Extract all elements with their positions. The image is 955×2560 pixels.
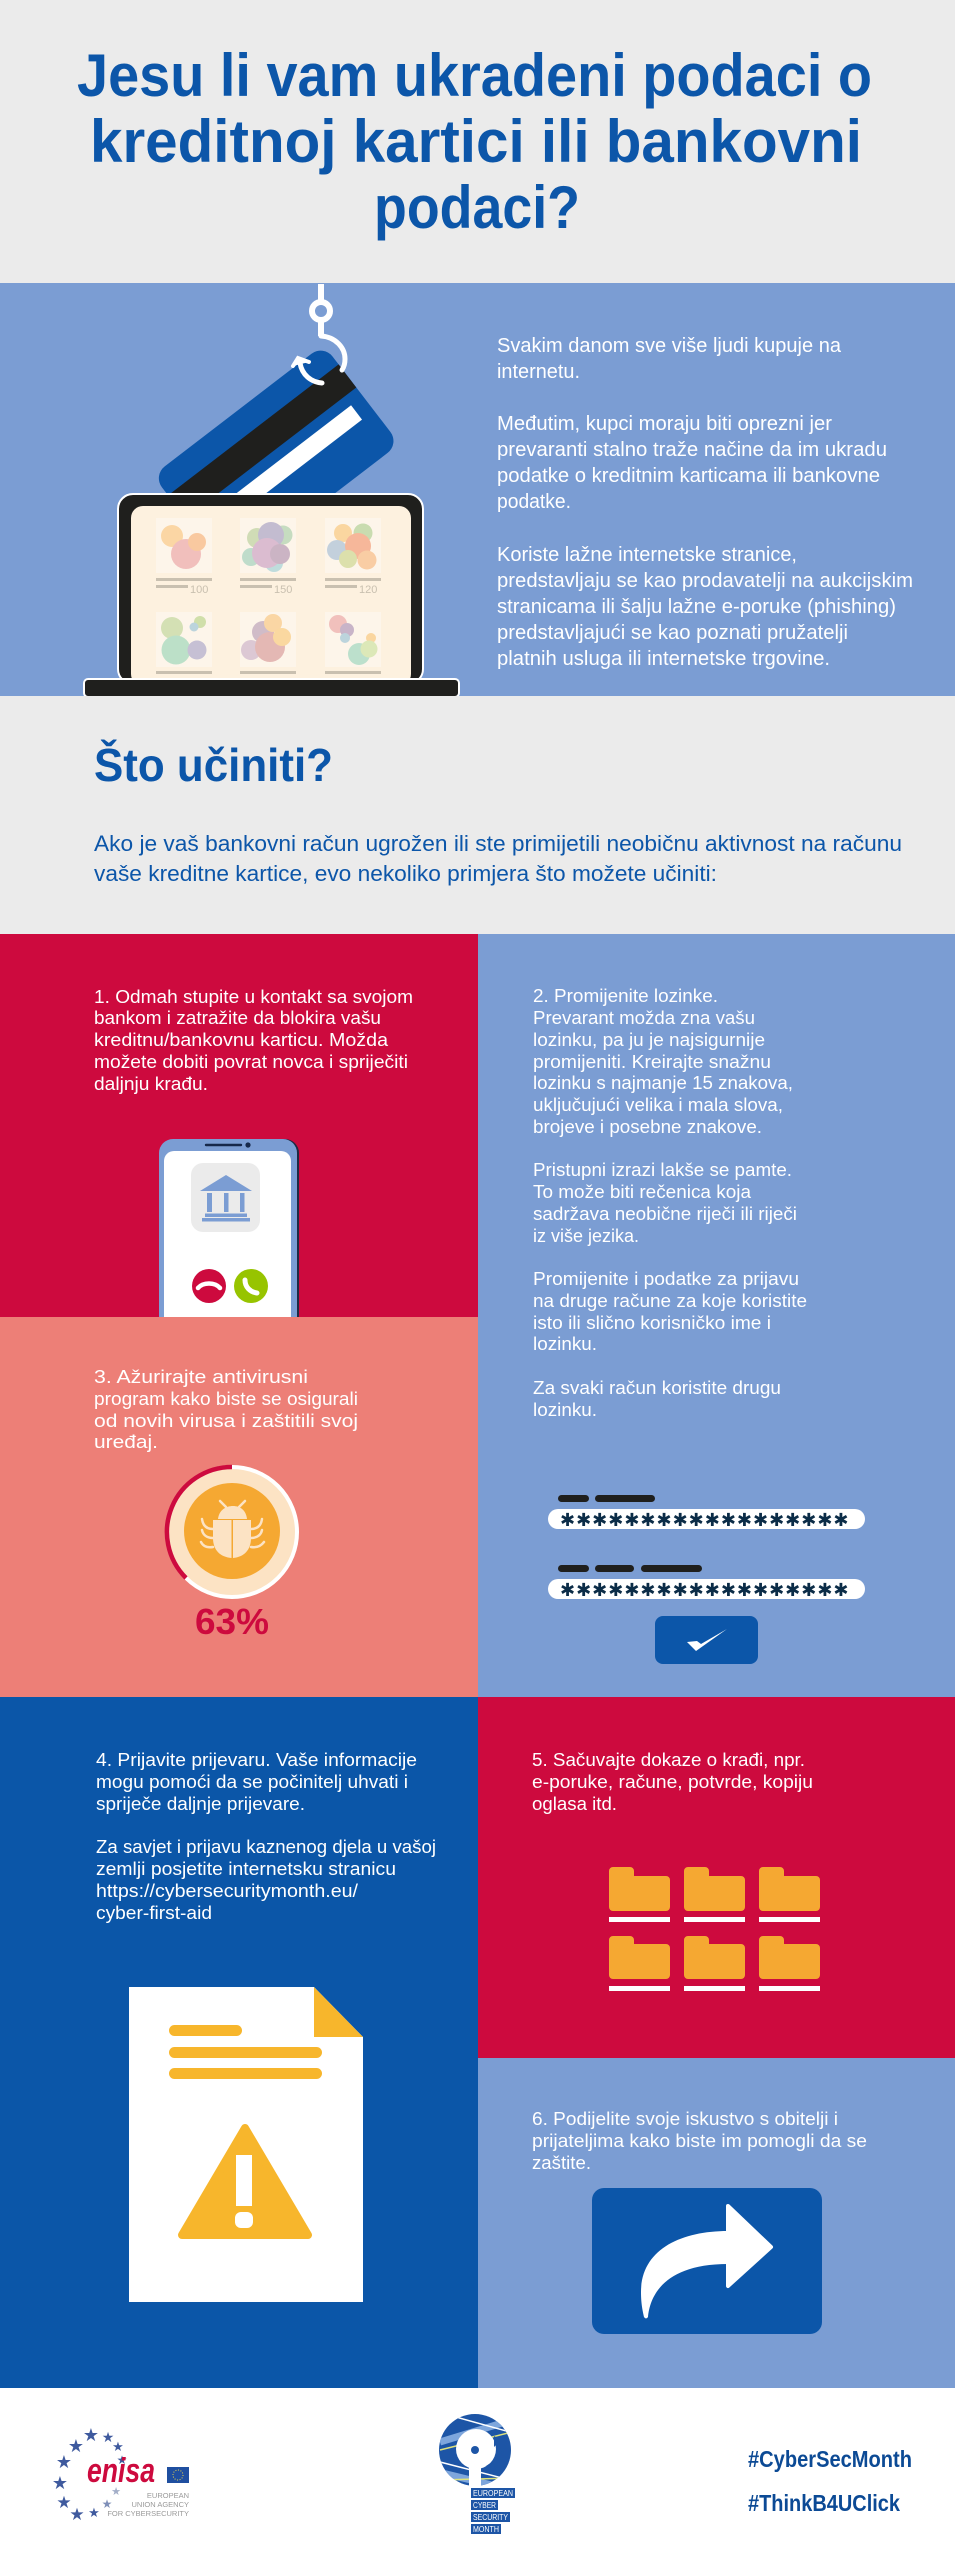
logo: enisa: EUROPEAN: [147, 2491, 189, 2500]
text block: what to do intro: Ako je vaš bankovni račun ugrožen ili ste primijetili neobičnu aktivnost na računu: [94, 831, 902, 856]
icon: laptop: 150: [274, 584, 292, 596]
text block: what to do intro: [94, 831, 902, 886]
logo: enisa: enisa: [87, 2452, 155, 2490]
text block: step 4: spriječe daljnje prijevare.: [96, 1793, 305, 1814]
hashtags: #CyberSecMonth: [748, 2446, 912, 2472]
text block: step 6: zaštite.: [532, 2152, 591, 2173]
text block: step 2: 2. Promijenite lozinke.: [533, 985, 718, 1006]
value: 63%: 63%: [195, 1601, 269, 1642]
logo: enisa: ★: [111, 2485, 121, 2498]
text block: introduction: prevaranti stalno traže načine da im ukradu: [497, 439, 887, 461]
panel: step 1: [0, 934, 478, 1317]
panel: what to do: [0, 696, 955, 934]
text block: step 2: Za svaki račun koristite drugu: [533, 1377, 781, 1398]
panel: title header: [0, 0, 955, 283]
text block: step 5: 5. Sačuvajte dokaze o krađi, npr.: [532, 1749, 805, 1770]
icon: laptop: [84, 494, 459, 697]
text block: introduction: internetu.: [497, 361, 580, 383]
logo: enisa: ★: [83, 2425, 99, 2446]
logo: european cyber security month: CYBER: [473, 2500, 496, 2510]
text block: introduction: podatke o kreditnim karticama ili bankovne: [497, 465, 880, 487]
text block: introduction: [497, 335, 913, 670]
logo: enisa: ★: [56, 2452, 72, 2473]
text block: introduction: Međutim, kupci moraju biti oprezni jer: [497, 413, 832, 435]
text block: step 3: uređaj.: [94, 1431, 158, 1452]
logo: enisa: ★: [69, 2505, 85, 2525]
text block: step 2: To može biti rečenica koja: [533, 1181, 752, 1202]
text block: step 6: prijateljima kako biste im pomogli da se: [532, 2130, 867, 2151]
panel: step 3: [0, 1317, 478, 1697]
icon: document with warning: [129, 1987, 363, 2302]
panel: step 5: [478, 1697, 955, 2058]
text block: step 6: [532, 2108, 867, 2173]
text block: step 2: Promijenite i podatke za prijavu: [533, 1268, 799, 1289]
text block: step 2: iz više jezika.: [533, 1225, 639, 1246]
panel: step 6: [478, 2058, 955, 2388]
icon: password form: ✱✱✱✱✱✱✱✱✱✱✱✱✱✱✱✱✱✱: [560, 1510, 849, 1531]
text block: step 1: [94, 986, 413, 1094]
icon: laptop: 100: [190, 584, 208, 596]
logo: enisa: ★: [102, 2497, 112, 2511]
logo: enisa: ★: [117, 2453, 127, 2467]
logo: enisa: UNION AGENCY: [131, 2500, 189, 2509]
text block: introduction: Koriste lažne internetske stranice,: [497, 544, 797, 566]
text block: step 2: promijeniti. Kreirajte snažnu: [533, 1051, 771, 1072]
logo: enisa: ★: [102, 2430, 114, 2446]
text block: step 3: 3. Ažurirajte antivirusni: [94, 1366, 308, 1387]
title: [77, 42, 872, 241]
hashtags: #ThinkB4UClick: [748, 2490, 900, 2516]
text block: step 2: Prevarant možda zna vašu: [533, 1007, 755, 1028]
logo: enisa: ★: [56, 2493, 72, 2513]
icon: laptop: 120: [359, 584, 377, 596]
icon: phone with bank call: [159, 1139, 299, 1317]
text block: step 1: bankom i zatražite da blokira vašu: [94, 1007, 381, 1028]
logo: enisa: ★: [88, 2506, 100, 2521]
logo: european cyber security month: [438, 2414, 515, 2534]
text block: step 1: možete dobiti povrat novca i spriječiti: [94, 1051, 408, 1072]
text block: introduction: podatke.: [497, 491, 571, 513]
text block: step 2: lozinku.: [533, 1333, 597, 1354]
logo: enisa: FOR CYBERSECURITY: [107, 2509, 189, 2518]
text block: step 1: kreditnu/bankovnu karticu. Možda: [94, 1029, 389, 1050]
text block: introduction: stranicama ili šalju lažne e-poruke (phishing): [497, 596, 896, 618]
heading: Što učiniti?: [94, 739, 333, 791]
panel: hero introduction: [0, 283, 955, 697]
text block: step 2: na druge račune za koje koristite: [533, 1290, 807, 1311]
text block: step 5: [532, 1749, 813, 1814]
icon: share arrow: [592, 2188, 822, 2334]
logo: european cyber security month: SECURITY: [473, 2512, 508, 2522]
text block: step 1: 1. Odmah stupite u kontakt sa svojom: [94, 986, 413, 1007]
icon: fishing hook line: [312, 284, 330, 336]
hashtags: [748, 2446, 912, 2516]
text block: step 1: daljnju krađu.: [94, 1073, 208, 1094]
text block: step 2: brojeve i posebne znakove.: [533, 1116, 762, 1137]
text block: introduction: predstavljajući se kao poznati pružatelji: [497, 622, 848, 644]
panel: footer: [53, 2414, 911, 2534]
logo: enisa: ★: [68, 2436, 84, 2457]
text block: step 2: lozinku.: [533, 1399, 597, 1420]
text block: step 2: lozinku s najmanje 15 znakova,: [533, 1072, 793, 1093]
logo: european cyber security month: EUROPEAN: [473, 2488, 513, 2498]
text block: step 4: mogu pomoći da se počinitelj uhvati i: [96, 1771, 408, 1792]
icon: password form: ✱✱✱✱✱✱✱✱✱✱✱✱✱✱✱✱✱✱: [560, 1580, 849, 1601]
text block: step 2: Pristupni izrazi lakše se pamte.: [533, 1159, 792, 1180]
logo: enisa: [52, 2425, 189, 2525]
text block: step 4: [96, 1749, 436, 1923]
icon: hook tip: [293, 336, 345, 383]
title: podaci?: [374, 174, 580, 241]
text block: introduction: platnih usluga ili internetske trgovine.: [497, 648, 830, 670]
text block: step 3: program kako biste se osigurali: [94, 1388, 358, 1409]
text block: what to do intro: vaše kreditne kartice, evo nekoliko primjera što možete učiniti:: [94, 861, 717, 886]
panel: step 2: [478, 934, 955, 1697]
text block: step 2: [533, 985, 807, 1420]
text block: introduction: Svakim danom sve više ljudi kupuje na: [497, 335, 842, 357]
panel: step 4: [0, 1697, 478, 2388]
text block: step 4: Za savjet i prijavu kaznenog djela u vašoj: [96, 1836, 436, 1857]
text block: step 5: e-poruke, račune, potvrde, kopiju: [532, 1771, 813, 1792]
icon: credit card: [153, 345, 399, 575]
title: kreditnoj kartici ili bankovni: [90, 108, 862, 175]
text block: step 4: zemlji posjetite internetsku stranicu: [96, 1858, 396, 1879]
logo: enisa: ★: [112, 2440, 124, 2455]
text block: step 6: 6. Podijelite svoje iskustvo s obitelji i: [532, 2108, 838, 2129]
text block: step 4: cyber-first-aid: [96, 1902, 212, 1923]
text block: step 2: isto ili slično korisničko ime i: [533, 1312, 771, 1333]
text block: step 5: oglasa itd.: [532, 1793, 617, 1814]
text block: step 2: sadržava neobične riječi ili riječi: [533, 1203, 797, 1224]
text block: step 3: [94, 1366, 358, 1452]
logo: european cyber security month: MONTH: [473, 2524, 499, 2534]
logo: enisa: ★: [52, 2473, 68, 2494]
text block: step 4: 4. Prijavite prijevaru. Vaše informacije: [96, 1749, 417, 1770]
text block: step 3: od novih virusa i zaštitili svoj: [94, 1410, 358, 1431]
text block: step 2: uključujući velika i mala slova,: [533, 1094, 783, 1115]
icon: folders: [609, 1867, 820, 1991]
icon: password form: [548, 1495, 865, 1664]
icon: antivirus gauge with bug: [167, 1467, 297, 1597]
text block: introduction: predstavljaju se kao prodavatelji na aukcijskim: [497, 570, 913, 592]
text block: step 4: https://cybersecuritymonth.eu/: [96, 1880, 359, 1901]
title: Jesu li vam ukradeni podaci o: [77, 42, 872, 109]
text block: step 2: lozinku, pa ju je najsigurnije: [533, 1029, 765, 1050]
